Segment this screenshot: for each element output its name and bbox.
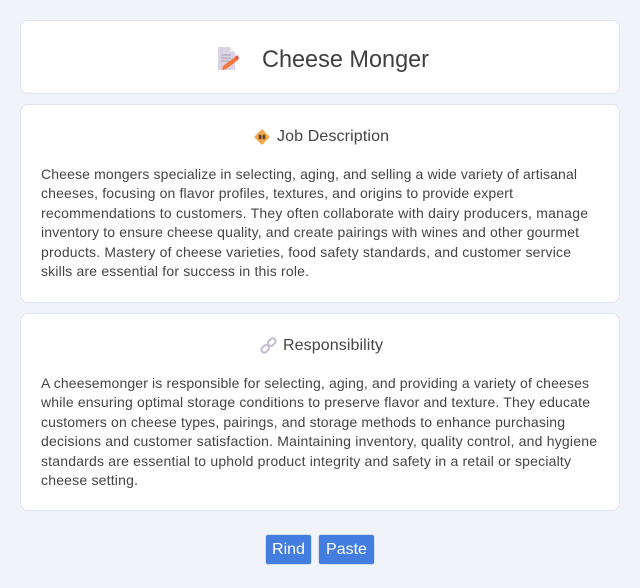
- text: responsibility body: A cheesemonger is responsible for selecting, aging, and providing a variety of cheeses: [41, 375, 589, 391]
- icon: document with pencil: [218, 47, 239, 70]
- text: responsibility body: customers on cheese types, pairings, and storage methods to enhance purchasing: [41, 414, 565, 430]
- text: responsibility body: while ensuring optimal storage conditions to preserve flavor and texture. They educate: [40, 394, 590, 410]
- panel: responsibility: [20, 313, 620, 511]
- button: Rind: [265, 534, 312, 565]
- text: job description body: skills are essential for success in this role.: [41, 263, 309, 279]
- text: responsibility body: standards are essential to uphold product integrity and safety in a retail or specialty: [41, 453, 571, 469]
- text: responsibility body: [40, 375, 597, 488]
- text: responsibility body: cheese setting.: [41, 472, 138, 488]
- heading: Cheese Monger: Cheese Monger: [262, 46, 429, 73]
- text: job description body: [41, 166, 588, 279]
- icon: chain link: [260, 337, 276, 354]
- button: Paste: [318, 534, 375, 565]
- text: responsibility body: decisions and customer satisfaction. Maintaining inventory, quality control, and hygiene: [41, 433, 597, 449]
- text: job description body: recommendations to customers. They often collaborate with dairy producers, manage: [41, 205, 588, 221]
- panel: title: [20, 20, 620, 94]
- button: Paste: Paste: [326, 541, 367, 558]
- button: Rind: Rind: [272, 541, 305, 558]
- heading: Responsibility: Responsibility: [283, 337, 383, 354]
- text: job description body: cheeses, focusing on flavor profiles, textures, and origins to provide expert: [41, 185, 513, 201]
- text: job description body: products. Mastery of cheese varieties, food safety standards, and customer service: [41, 244, 571, 260]
- heading: Job Description: Job Description: [277, 128, 389, 145]
- text: job description body: Cheese mongers specialize in selecting, aging, and selling a wide variety of artisanal: [41, 166, 577, 182]
- icon: orange diamond sign: [254, 129, 270, 145]
- text: job description body: inventory to ensure cheese quality, and create pairings with wines and other gourmet: [41, 224, 579, 240]
- panel: job description: [20, 104, 620, 303]
